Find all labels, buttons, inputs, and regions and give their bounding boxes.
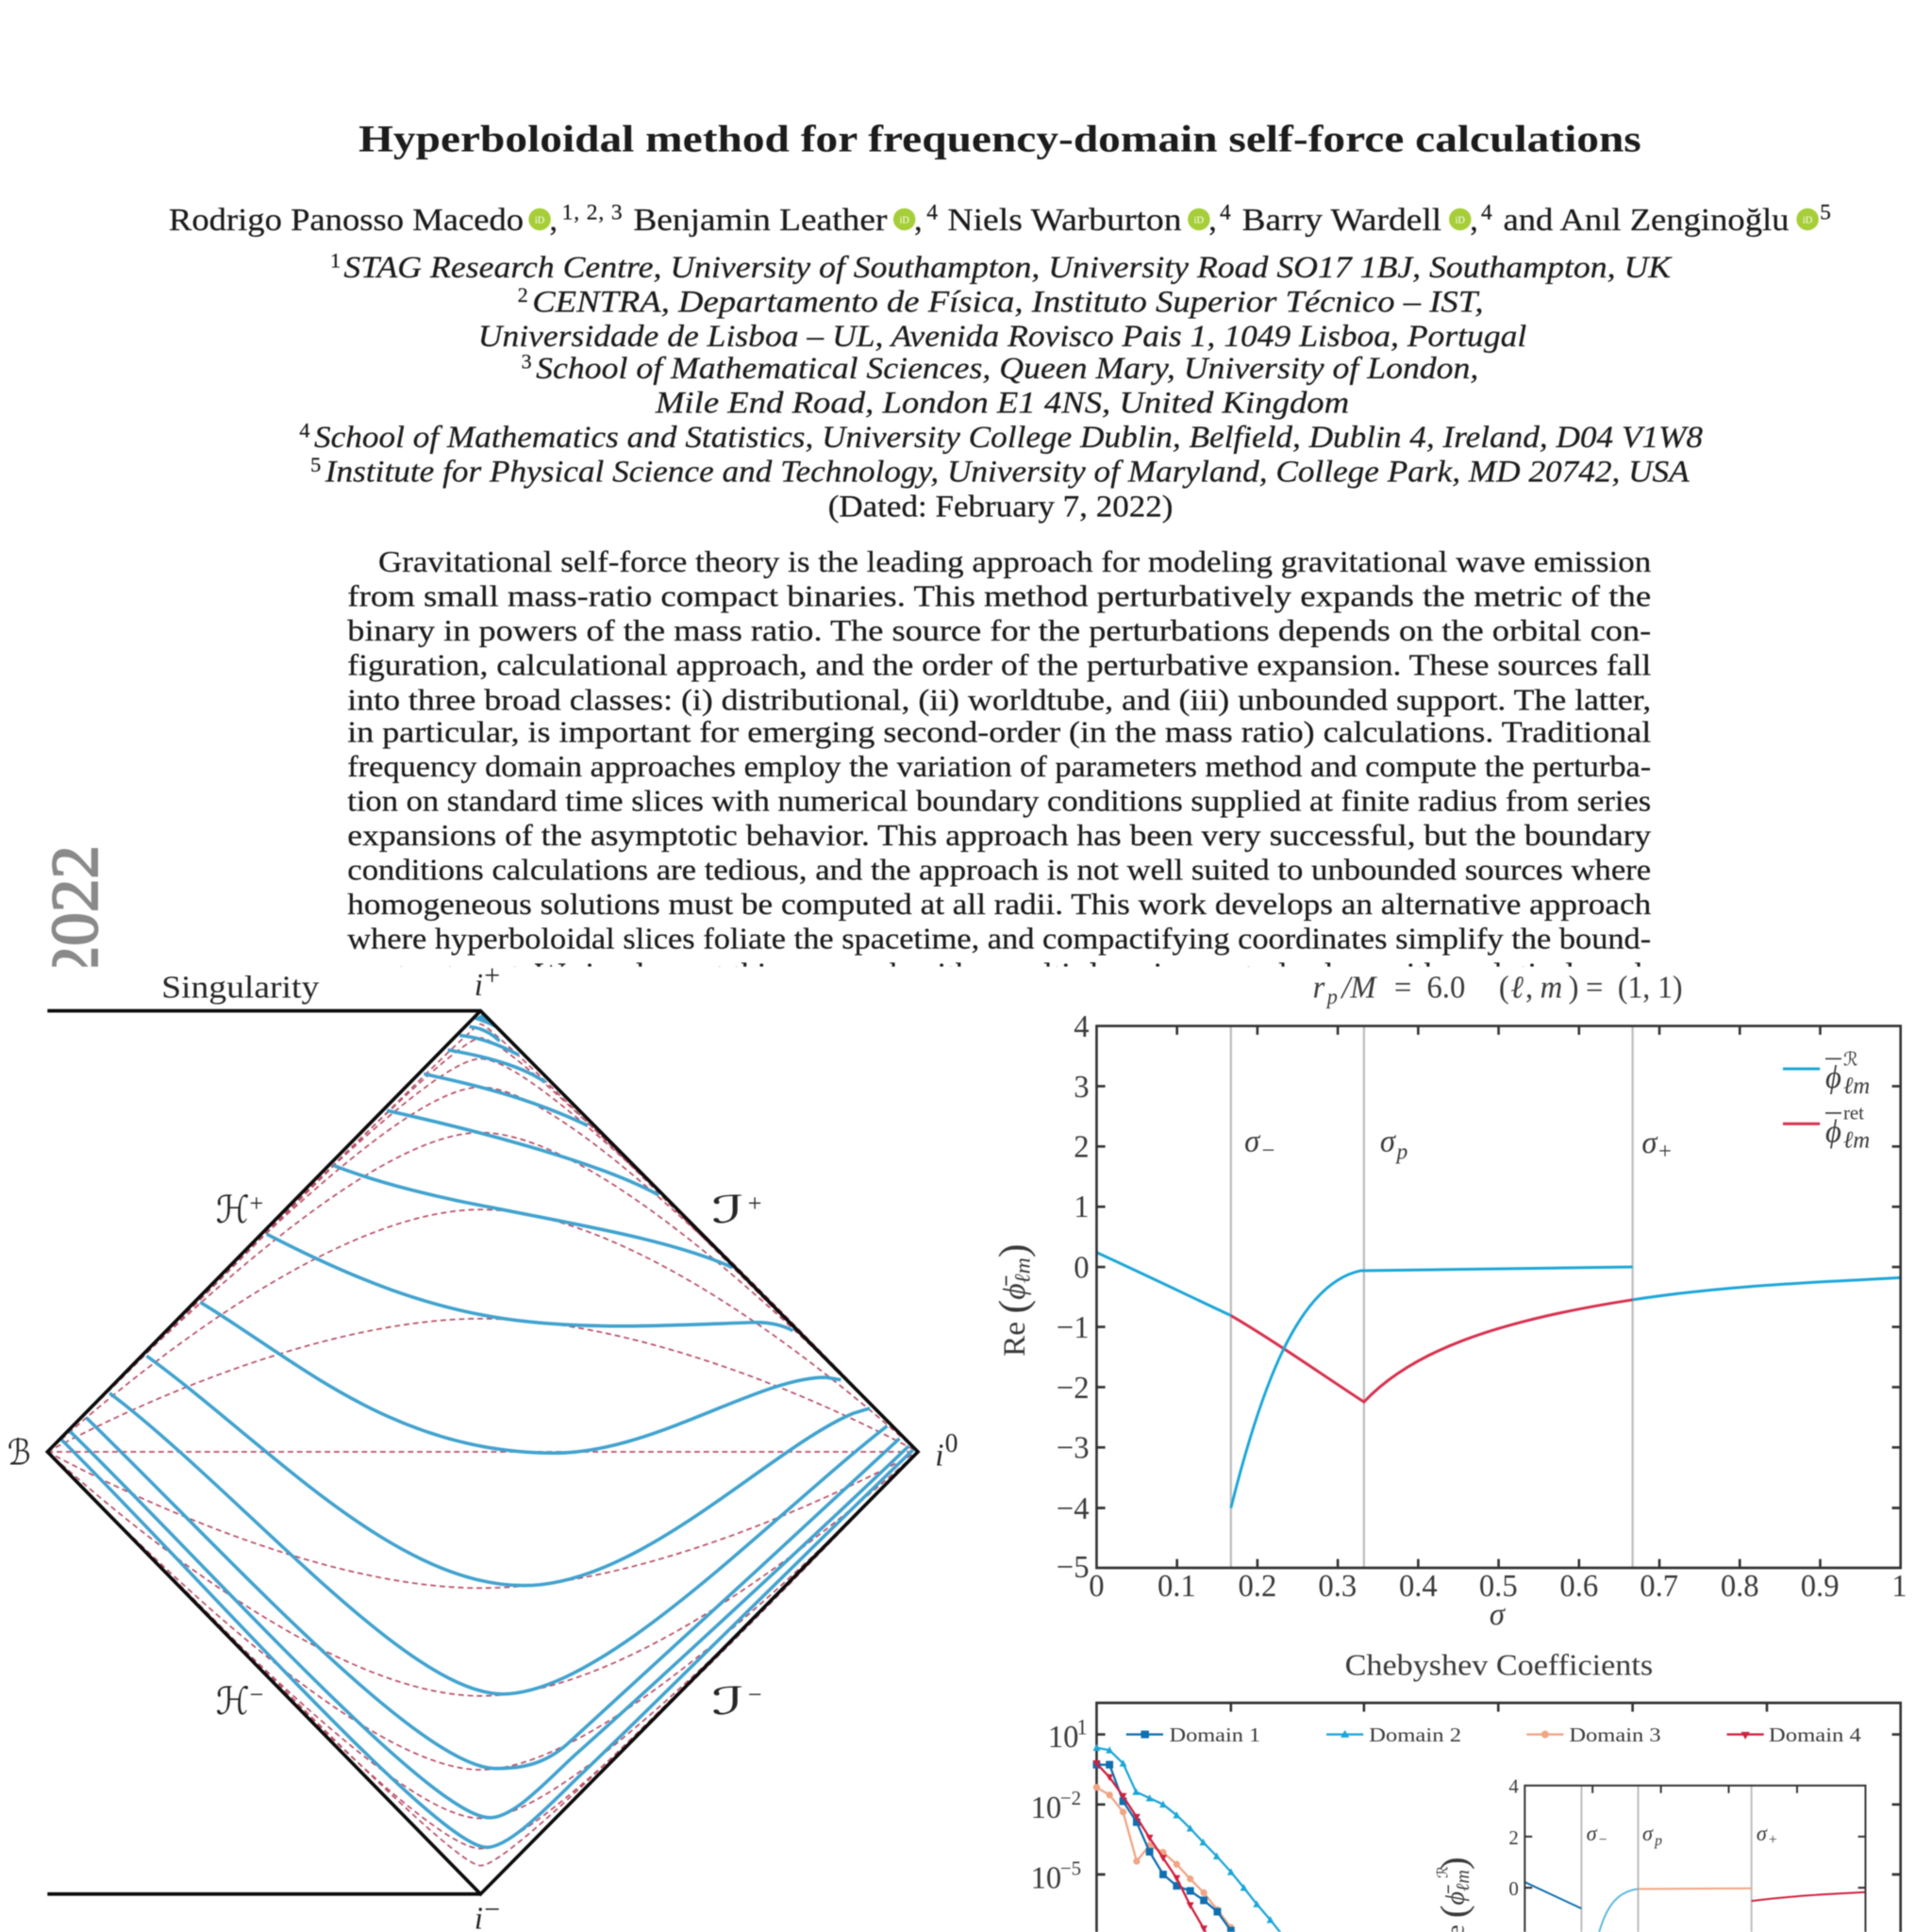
affiliations: 5 [310, 453, 321, 476]
y axis labels: −3 [1057, 1431, 1090, 1466]
y axis title: ℓm [1011, 1257, 1035, 1283]
boundary labels: ℋ [216, 1680, 249, 1724]
title: Hyperboloidal method for frequency-domain self-force calculations [358, 118, 1641, 160]
x axis labels: σ [1490, 1598, 1507, 1632]
author list: , [1208, 203, 1217, 238]
author list: , [550, 203, 558, 238]
frame and ticks [1096, 1703, 1901, 1932]
x axis labels: 0.7 [1640, 1570, 1678, 1604]
white figure overlay [0, 967, 1932, 1932]
legend [1126, 1724, 1861, 1746]
chart title: ℓ [1510, 971, 1524, 1006]
x axis labels: 0.5 [1479, 1570, 1518, 1604]
affiliations: 4 [299, 419, 309, 442]
inset boundary labels: + [1769, 1832, 1777, 1848]
affiliations: 3 [521, 350, 532, 374]
boundary labels: i [475, 968, 483, 1003]
y axis labels [1057, 1010, 1090, 1585]
author list: Benjamin Leather [633, 203, 887, 238]
inset plot [1432, 1775, 1865, 1932]
y axis labels: 2 [1074, 1130, 1090, 1165]
chart title: , [1525, 971, 1533, 1006]
legend: ℛ [1843, 1048, 1858, 1071]
y axis title: ( [991, 1300, 1037, 1314]
y axis labels: 10 [1048, 1721, 1078, 1755]
domain boundary labels: σ [1641, 1126, 1658, 1160]
regular field curve [1096, 1253, 1901, 1507]
abstract: tion on standard time slices with numerical boundary conditions supplied at finite radius from series [347, 783, 1651, 817]
arXiv watermark year: 2022 [39, 845, 112, 979]
icon: ORCID 3 [1188, 208, 1210, 230]
affiliations: Mile End Road, London E1 4NS, United Kingdom [655, 387, 1349, 421]
boundary labels: i [935, 1439, 943, 1474]
inset boundary labels [1587, 1822, 1777, 1849]
boundary labels: ℬ [8, 1432, 31, 1473]
legend: Domain 3 [1569, 1724, 1661, 1746]
legend: Domain 4 [1769, 1724, 1861, 1746]
chart title: /M [1340, 971, 1378, 1006]
chart title: m [1541, 971, 1562, 1006]
legend: ℓm [1843, 1074, 1870, 1099]
abstract: where hyperboloidal slices foliate the spacetime, and compactifying coordinates simplify the bound- [347, 922, 1651, 956]
abstract: into three broad classes: (i) distributional, (ii) worldtube, and (iii) unbounded support. The latter, [347, 682, 1651, 716]
y axis labels: 10 [1031, 1791, 1061, 1825]
domain boundary labels: σ [1380, 1124, 1397, 1159]
y axis labels: 0 [1074, 1251, 1090, 1285]
icon: ORCID 2 [893, 208, 915, 230]
domain boundary labels: σ [1244, 1124, 1261, 1159]
boundary labels: ℋ [216, 1189, 249, 1232]
boundary labels: + [748, 1189, 762, 1217]
boundary labels: − [249, 1680, 263, 1708]
author list: , [1470, 203, 1478, 238]
chart: field profile [991, 971, 1907, 1632]
author list: , [914, 203, 923, 238]
abstract: in particular, is important for emerging second-order (in the mass ratio) calculations. Traditional [347, 714, 1651, 748]
chart title: ) [1569, 971, 1579, 1006]
abstract: Gravitational self-force theory is the leading approach for modeling gravitational wave emission [378, 544, 1651, 578]
author list: 4 [1220, 200, 1231, 225]
author list: 4 [1481, 200, 1492, 225]
Penrose diagram [8, 959, 958, 1932]
affiliations: School of Mathematical Sciences, Queen Mary, University of London, [536, 352, 1478, 386]
inset superscript: ℛ [1434, 1866, 1452, 1878]
retarded field curve [1231, 1300, 1633, 1402]
inset boundary labels: − [1599, 1832, 1607, 1848]
y axis labels: −5 [1060, 1857, 1081, 1880]
author list [169, 200, 1831, 238]
affiliations: (Dated: February 7, 2022) [828, 490, 1173, 524]
inset curves [1524, 1882, 1865, 1932]
icon: ORCID 5 [1796, 208, 1819, 230]
legend: Domain 1 [1170, 1724, 1260, 1746]
boundary labels: + [484, 959, 500, 991]
inset boundary labels: σ [1642, 1822, 1654, 1845]
boundary labels: − [484, 1893, 500, 1925]
abstract: conditions calculations are tedious, and the approach is not well suited to unbounded sources where [347, 853, 1651, 887]
y axis title: ) [991, 1243, 1037, 1257]
domain boundary labels: − [1261, 1138, 1274, 1163]
grey domain lines [1231, 1026, 1633, 1568]
abstract: frequency domain approaches employ the variation of parameters method and compute the perturba- [347, 749, 1651, 783]
legend: Domain 2 [1369, 1724, 1461, 1746]
inset domain lines [1581, 1786, 1752, 1932]
blue hyperboloidal slices [61, 1014, 913, 1847]
author list: and Anıl Zenginoğlu [1503, 203, 1790, 238]
y axis labels: −5 [1057, 1551, 1090, 1585]
x axis labels: 0.6 [1559, 1570, 1598, 1604]
chart title: ( [1499, 971, 1509, 1006]
x axis labels: 1 [1891, 1570, 1907, 1604]
inset boundary labels: σ [1757, 1822, 1768, 1845]
black spacetime boundary [47, 1011, 918, 1894]
author list: Rodrigo Panosso Macedo [169, 203, 524, 238]
chart title: r [1313, 971, 1325, 1006]
chart title: = [1586, 971, 1603, 1006]
inset y axis title: ( [1432, 1905, 1474, 1918]
domain boundary labels: + [1658, 1139, 1672, 1165]
author list: Niels Warburton [947, 203, 1182, 238]
boundary labels: + [249, 1189, 263, 1217]
boundary labels: Singularity [161, 971, 320, 1006]
plot frame and ticks [1096, 1026, 1901, 1568]
abstract: expansions of the asymptotic behavior. This approach has been very successful, but the boundary [347, 818, 1651, 852]
icon: ORCID 3: iD [1194, 215, 1205, 225]
inset frame and ticks [1524, 1786, 1865, 1932]
x axis labels: 0.8 [1721, 1570, 1759, 1604]
icon: ORCID 4 [1449, 208, 1472, 230]
inset boundary labels: σ [1587, 1822, 1597, 1845]
chart title: = [1394, 971, 1411, 1006]
chart title: 6.0 [1426, 971, 1465, 1006]
domain boundary labels: p [1395, 1140, 1407, 1165]
series: domain 4 [1096, 1763, 1217, 1932]
affiliations: School of Mathematics and Statistics, University College Dublin, Belfield, Dublin 4, Ireland, D04 V1W8 [314, 421, 1703, 455]
affiliations: Institute for Physical Science and Technology, University of Maryland, College Park, MD 20742, USA [325, 456, 1690, 490]
x axis labels: 0.9 [1801, 1570, 1840, 1604]
affiliations: Universidade de Lisboa – UL, Avenida Rovisco Pais 1, 1049 Lisboa, Portugal [478, 320, 1526, 354]
boundary labels: ℐ [711, 1680, 745, 1724]
chart title: (1, 1) [1618, 971, 1683, 1006]
legend: ℓm [1843, 1127, 1870, 1154]
y axis labels [1031, 1715, 1088, 1896]
author list: Barry Wardell [1242, 203, 1441, 238]
inset axis labels: 4 [1508, 1775, 1519, 1798]
inset boundary labels: p [1654, 1833, 1662, 1849]
boundary labels [8, 959, 958, 1932]
inset axis labels [1498, 1775, 1519, 1932]
author list: 1, 2, 3 [562, 200, 623, 225]
y axis labels: 10 [1031, 1861, 1061, 1896]
y axis labels: 1 [1074, 1191, 1090, 1224]
x axis labels: 0.2 [1238, 1570, 1276, 1604]
boundary labels: ℐ [711, 1189, 745, 1232]
icon: ORCID 2: iD [899, 215, 909, 225]
y axis title: Re [998, 1322, 1032, 1357]
abstract: from small mass-ratio compact binaries. This method perturbatively expands the metric of the [347, 579, 1651, 613]
affiliations: STAG Research Centre, University of Southampton, University Road SO17 1BJ, Southampton, UK [343, 251, 1674, 285]
y axis labels: 3 [1074, 1071, 1090, 1105]
y axis labels: −2 [1057, 1372, 1090, 1406]
y axis labels: −4 [1057, 1492, 1090, 1526]
y axis labels: 1 [1077, 1715, 1088, 1740]
y axis title: ϕ̄ [998, 1274, 1032, 1300]
inset y axis title: ϕ̄ [1441, 1885, 1471, 1905]
red dashed time slices [47, 1024, 918, 1866]
chart title: Chebyshev Coefficients [1345, 1648, 1653, 1682]
domain boundary labels [1244, 1124, 1672, 1165]
x axis labels: 0.1 [1158, 1570, 1196, 1604]
series: domain 3 [1096, 1788, 1244, 1932]
affiliations [299, 248, 1703, 524]
inset y axis title: ℓm [1453, 1870, 1474, 1891]
legend [1783, 1048, 1870, 1154]
legend: ret [1843, 1101, 1864, 1124]
icon: ORCID 1: iD [535, 215, 545, 225]
affiliations: CENTRA, Departamento de Física, Instituto Superior Técnico – IST, [532, 285, 1484, 319]
inset y axis title: ) [1432, 1857, 1474, 1870]
icon: ORCID 4: iD [1456, 215, 1465, 225]
affiliations: 1 [330, 248, 341, 272]
abstract [347, 544, 1651, 990]
abstract: ary treatment. We implement this approach with a multi-domain spectral solver with analytical mesh [347, 956, 1651, 990]
abstract: figuration, calculational approach, and the order of the perturbative expansion. These sources fall [347, 648, 1651, 682]
chart title [1313, 971, 1683, 1008]
icon: ORCID 1 [528, 208, 551, 230]
x axis labels: 0 [1089, 1570, 1105, 1604]
chart title: p [1325, 985, 1338, 1008]
author list: 5 [1820, 200, 1831, 225]
chart: Chebyshev coefficients [1031, 1648, 1901, 1932]
abstract: binary in powers of the mass ratio. The source for the perturbations depends on the orbital con- [347, 613, 1651, 647]
x axis labels [1089, 1570, 1907, 1632]
y axis labels: −2 [1060, 1787, 1081, 1809]
legend: ϕ [1825, 1115, 1841, 1150]
icon: ORCID 5: iD [1803, 215, 1813, 225]
inset axis labels: 0 [1508, 1877, 1519, 1900]
series: domain 1 [1096, 1765, 1244, 1932]
boundary labels: − [748, 1680, 762, 1708]
x axis labels: 0.4 [1399, 1570, 1438, 1604]
boundary labels: 0 [945, 1429, 958, 1458]
affiliations: 2 [518, 283, 528, 307]
inset axis labels: 2 [1508, 1826, 1519, 1849]
abstract: homogeneous solutions must be computed at all radii. This work develops an alternative approach [347, 887, 1651, 921]
y axis labels: 4 [1074, 1010, 1090, 1044]
legend: ϕ [1825, 1061, 1841, 1095]
x axis labels: 0.3 [1318, 1570, 1357, 1604]
author list: 4 [926, 200, 938, 225]
series: domain 2 [1096, 1748, 1284, 1932]
y axis labels: −1 [1057, 1311, 1090, 1345]
